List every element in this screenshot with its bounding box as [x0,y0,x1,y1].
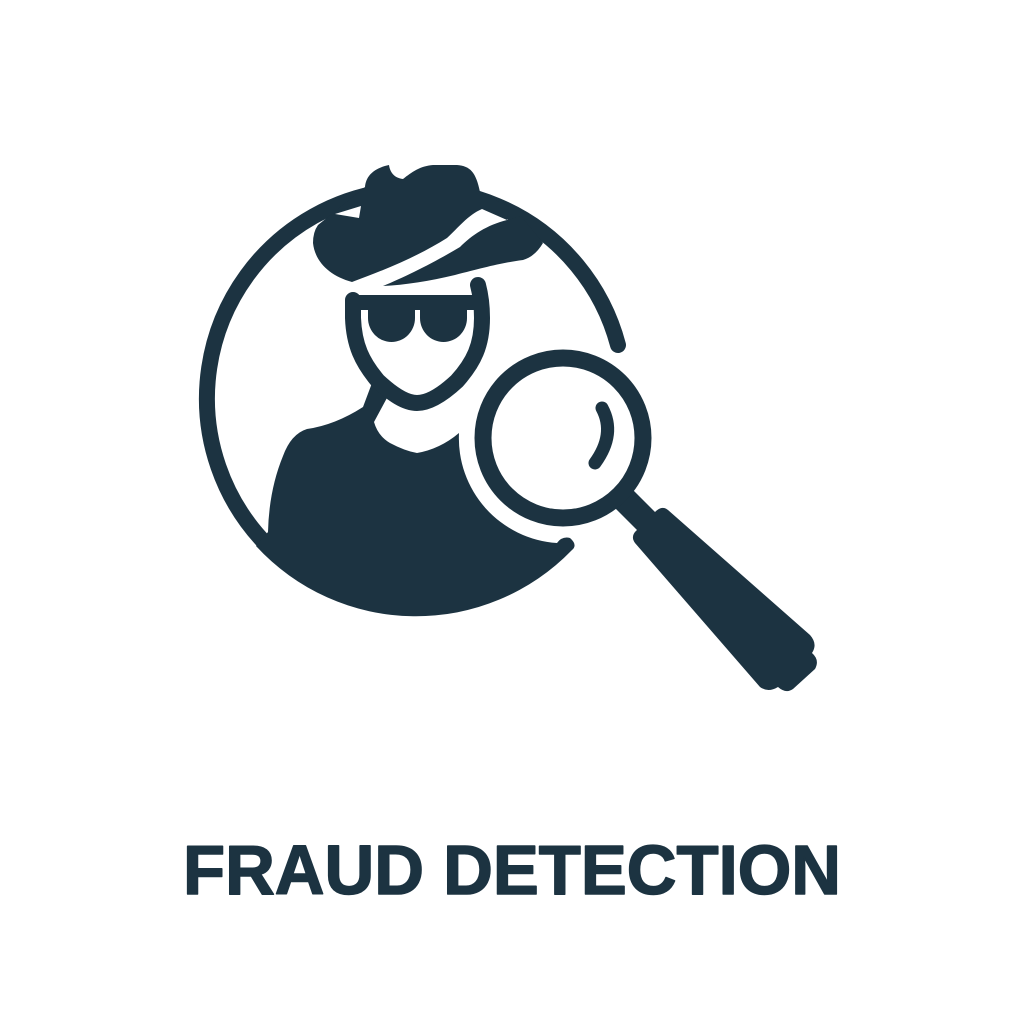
hat highlight [335,206,361,218]
lens ring [483,358,643,518]
face outline [353,285,482,403]
icon: magnifying glass [483,358,817,691]
sunglasses [350,295,480,342]
circle outline [207,189,618,543]
glasses band [350,295,480,310]
hat brim [383,216,543,286]
right lens [420,309,467,342]
lens glint [595,408,608,463]
icon: fraudster in circle [207,165,618,616]
body [256,383,575,616]
left lens [368,309,415,342]
title: FRAUD DETECTION [183,831,841,909]
hat crown [313,165,509,282]
handle [610,485,817,691]
